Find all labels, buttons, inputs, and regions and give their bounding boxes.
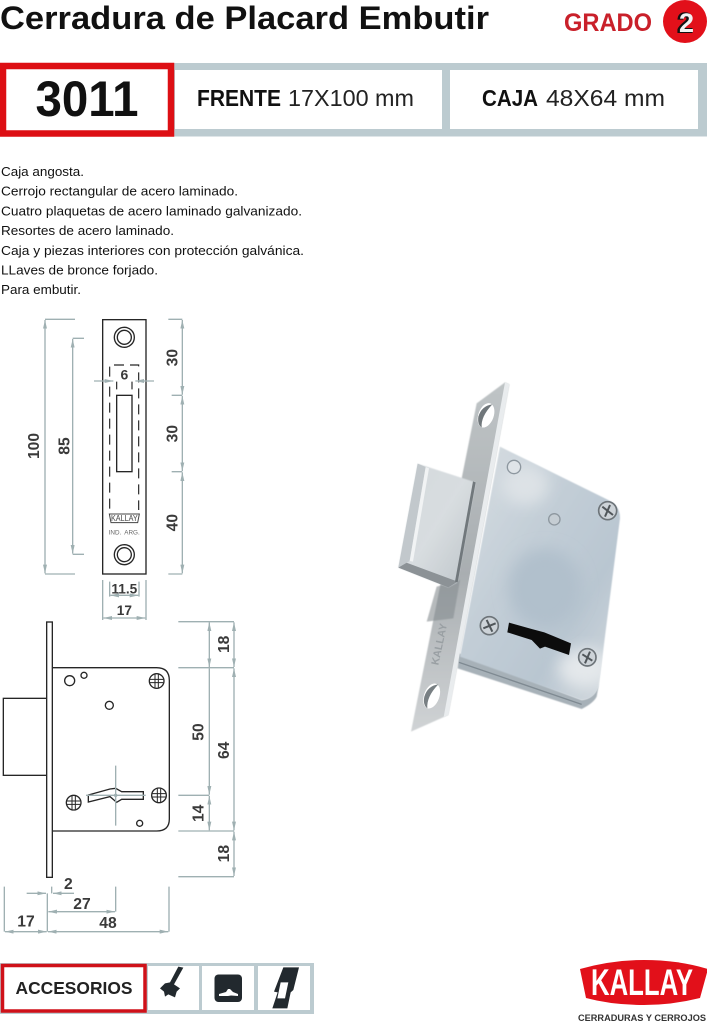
feature list: LLaves de bronce forjado. <box>1 262 158 278</box>
stamped brand: ARG. <box>124 530 140 537</box>
right dimension lines: 18 <box>216 635 233 653</box>
dimensions 30 30 40: 30 <box>165 349 182 366</box>
feature list: Resortes de acero laminado. <box>1 223 174 238</box>
bottom dimension lines: 2 <box>64 876 73 893</box>
icon: strike plate <box>258 966 310 1010</box>
right dimension lines: 64 <box>216 741 233 759</box>
dimensions 11.5 and 17: 17 <box>117 603 132 618</box>
grade number: 2 <box>679 8 694 38</box>
stamped brand: IND. <box>109 530 122 537</box>
case size box <box>450 70 698 129</box>
grade number: 2 <box>677 8 693 38</box>
bolt slot <box>117 395 132 472</box>
top mounting hole <box>474 401 498 430</box>
accessories label box <box>2 966 145 1011</box>
grade circle <box>663 0 707 43</box>
brand logo <box>578 960 707 1023</box>
feature list: Caja angosta. <box>1 164 84 179</box>
screws <box>66 674 166 810</box>
bolt shadow <box>427 580 460 622</box>
front size box <box>175 70 442 129</box>
top screw hole <box>114 327 134 347</box>
model and size bar <box>0 63 707 136</box>
case surface highlights <box>502 465 612 688</box>
dimensions 30 30 40: 40 <box>165 514 182 531</box>
dimensions 11.5 and 17 <box>103 580 146 620</box>
accessories label box: ACCESORIOS <box>16 978 132 998</box>
case size box: CAJA <box>482 85 538 111</box>
rivets and screws <box>480 460 617 666</box>
grade badge <box>564 0 707 43</box>
keyhole <box>507 623 571 655</box>
keyhole <box>86 766 146 826</box>
dimensions 11.5 and 17: 11.5 <box>111 582 138 597</box>
bolt bottom face <box>398 562 458 587</box>
dimensions 30 30 40: 30 <box>165 425 182 442</box>
case body <box>460 447 620 700</box>
faceplate side <box>47 622 52 877</box>
case bottom edge <box>458 653 599 709</box>
dimension 85: 85 <box>56 437 73 455</box>
bottom dimension lines: 17 <box>17 914 35 931</box>
bottom mounting hole <box>420 681 443 711</box>
accessories bar <box>0 963 314 1014</box>
right dimension lines: 50 <box>191 723 208 741</box>
dimension 85 <box>56 338 84 554</box>
stamped brand on faceplate: KALLAY <box>429 622 450 666</box>
title: Cerradura de Placard Embutir <box>0 0 489 36</box>
feature list: Caja y piezas interiores con protección galvánica. <box>1 243 304 258</box>
stamped brand: KALLAY <box>111 514 138 523</box>
rivets <box>65 672 143 826</box>
bolt left highlight <box>410 467 429 562</box>
bottom dimension lines <box>4 876 169 932</box>
bottom dimension lines: 27 <box>73 896 91 913</box>
case bottom edge groove <box>459 662 582 704</box>
faceplate bevel <box>444 382 509 717</box>
front plate technical drawing <box>26 319 182 620</box>
hidden case outline <box>110 365 139 510</box>
right dimension lines: 14 <box>191 804 208 822</box>
bolt left bevel <box>398 464 426 568</box>
feature list <box>1 164 304 297</box>
dimension 100 <box>26 319 75 574</box>
logo shape <box>580 960 707 1005</box>
front size box: FRENTE <box>197 85 281 111</box>
dimension 6 <box>94 366 154 382</box>
feature list: Cuatro plaquetas de acero laminado galvanizado. <box>1 204 302 218</box>
feature list: Para embutir. <box>1 282 81 297</box>
product photo: lock <box>398 382 620 732</box>
feature list: Cerrojo rectangular de acero laminado. <box>1 184 238 198</box>
bottom dimension lines: 48 <box>99 915 117 932</box>
faceplate outline <box>103 320 146 574</box>
case size box: 48X64 mm <box>546 85 665 111</box>
stamped brand <box>109 514 140 537</box>
dimension 100: 100 <box>26 433 43 459</box>
case outline <box>52 668 169 831</box>
icon: key <box>148 966 199 1010</box>
right dimension lines <box>178 622 234 877</box>
icon: keyhole plate <box>202 966 254 1010</box>
front size box: 17X100 mm <box>288 85 414 111</box>
dimension 6: 6 <box>120 366 128 382</box>
logo tagline: CERRADURAS Y CERROJOS <box>578 1013 706 1023</box>
bottom screw hole <box>114 545 134 565</box>
bolt outline <box>3 698 47 775</box>
bolt front face <box>398 464 476 587</box>
grade label: GRADO <box>564 9 652 37</box>
faceplate <box>411 382 509 732</box>
side view technical drawing <box>3 622 234 932</box>
dimensions 30 30 40 <box>165 319 182 574</box>
model number box: 3011 <box>36 71 138 127</box>
model number box <box>3 66 171 134</box>
bolt right shadow edge <box>455 481 476 582</box>
right dimension lines: 18 <box>216 845 233 862</box>
